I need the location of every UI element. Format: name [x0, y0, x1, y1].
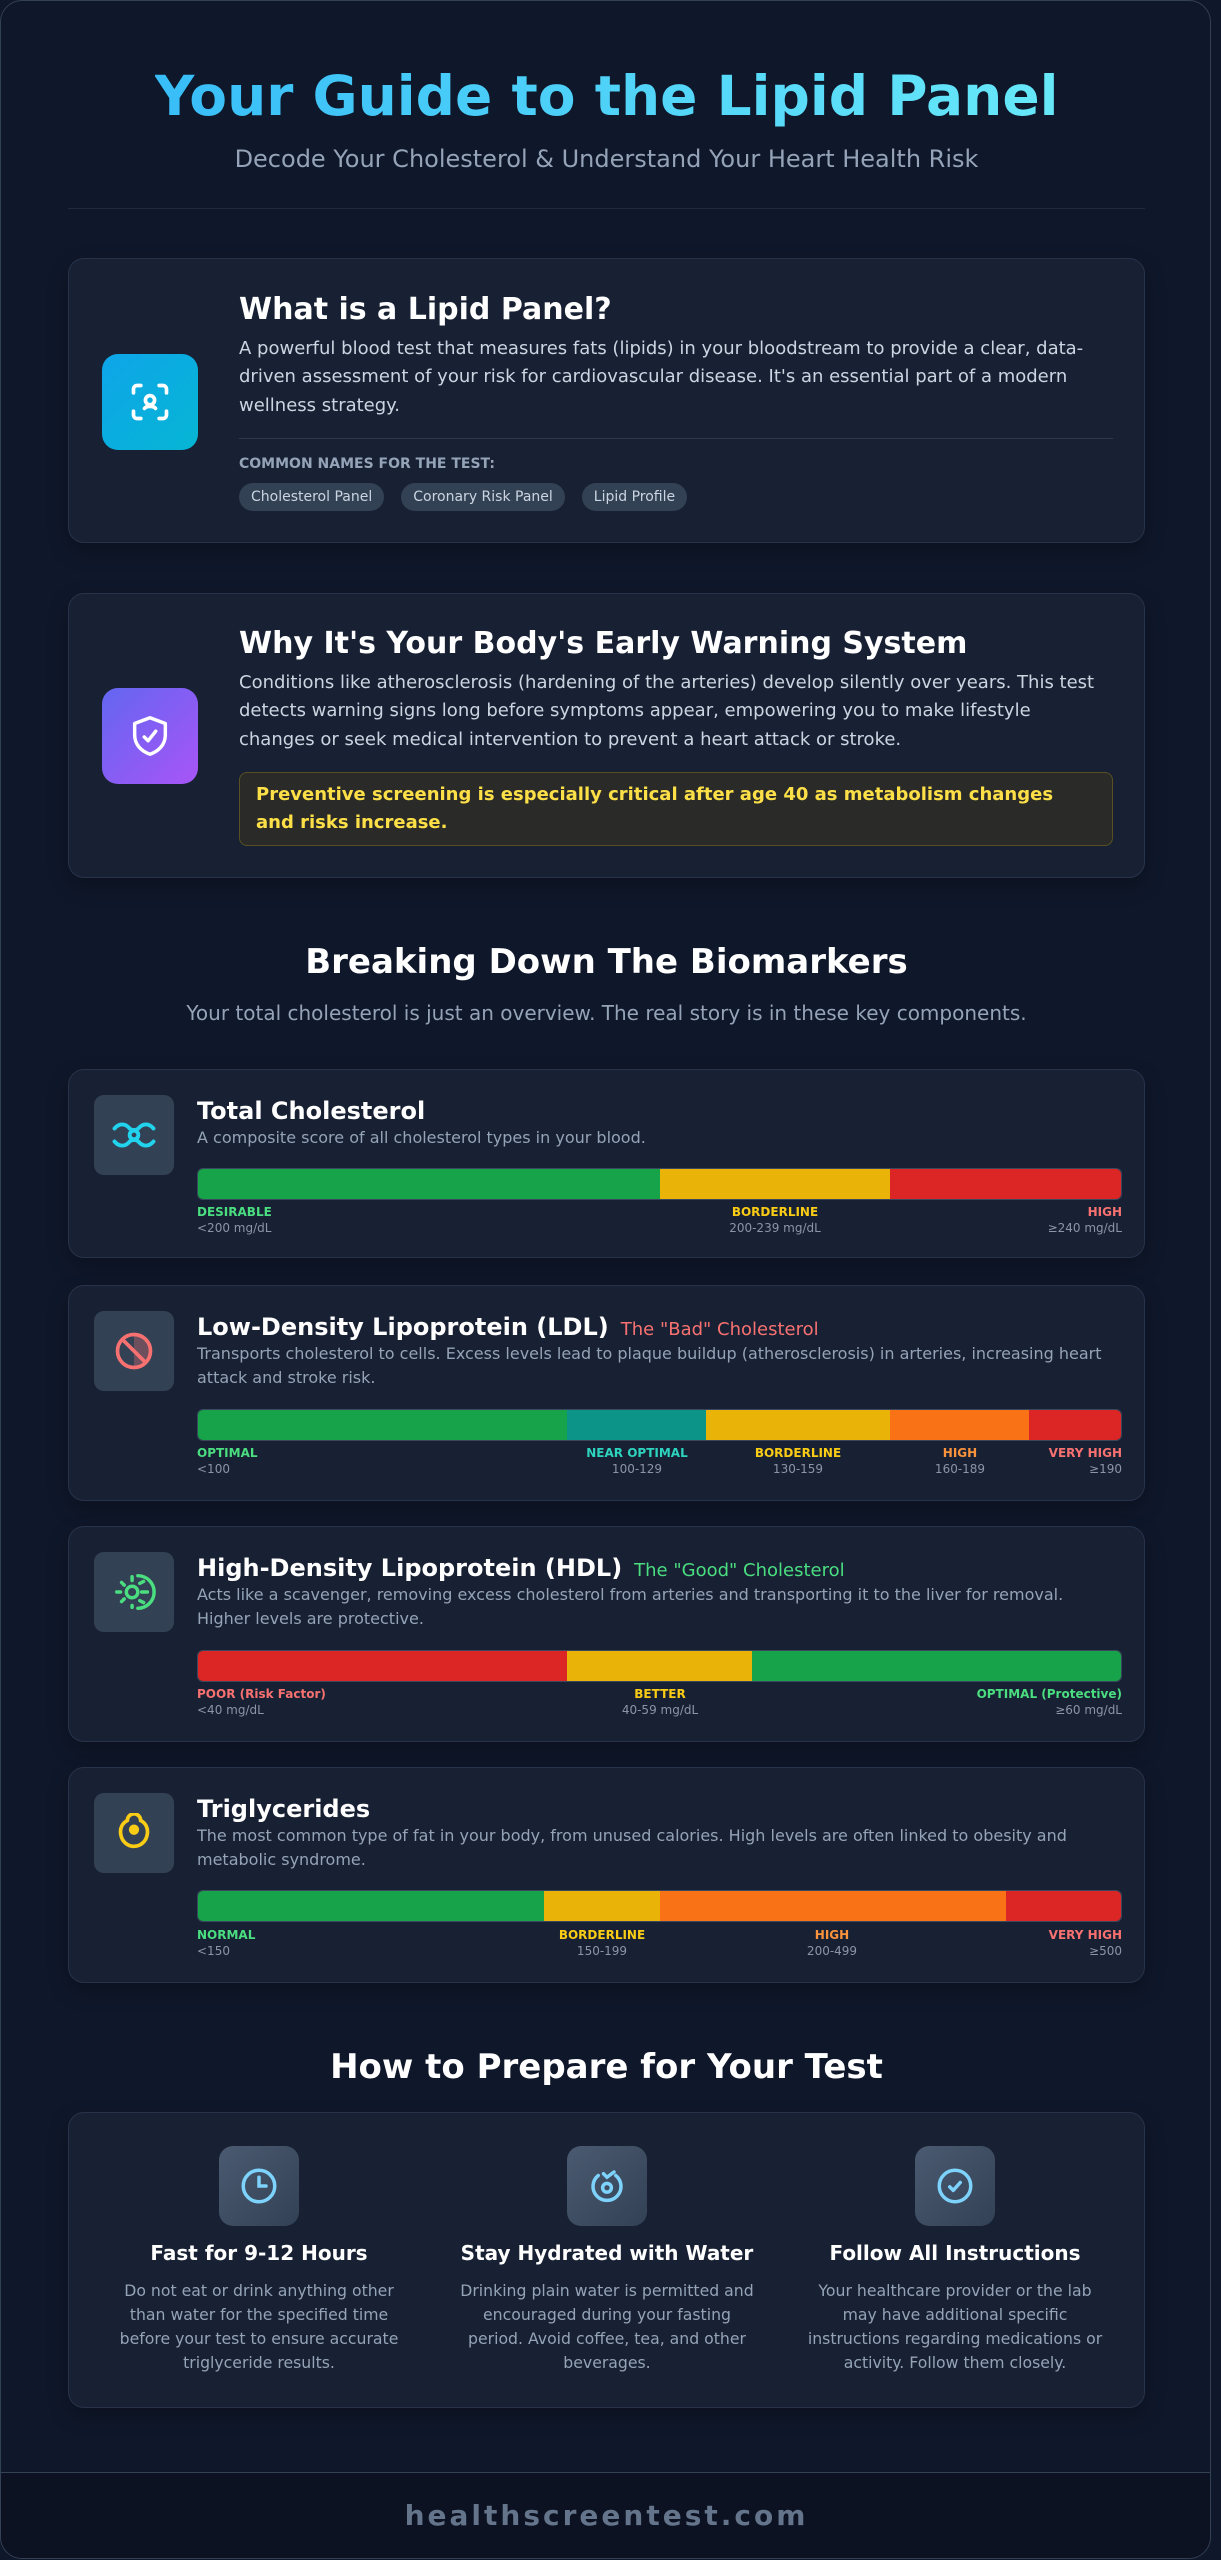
legend: NORMAL: [197, 1928, 255, 1942]
panel: preparation steps: [68, 2112, 1145, 2408]
panel: LDL: [68, 1285, 1145, 1501]
icon: ban: [94, 1311, 174, 1391]
step: instructions: Follow All Instructions: [829, 2241, 1081, 2265]
text block: A powerful blood test that measures fats (lipids) in your bloodstream to provide a clear, data-driven assessment of your risk for cardiovascular disease. It's an essential part of a modern wellness strategy.: [239, 338, 1083, 416]
legend: OPTIMAL: [197, 1446, 258, 1460]
icon: total cholesterol: [94, 1095, 174, 1175]
title: Your Guide to the Lipid Panel: [154, 64, 1058, 128]
legend: ≥500: [1089, 1944, 1122, 1958]
icon: scan: [102, 354, 198, 450]
legend: 200-239 mg/dL: [729, 1221, 821, 1235]
legend: 200-499: [807, 1944, 857, 1958]
legend: BETTER: [634, 1687, 686, 1701]
legend: ≥190: [1089, 1462, 1122, 1476]
legend: ≥240 mg/dL: [1048, 1221, 1122, 1235]
subtitle: Decode Your Cholesterol & Understand Your Heart Health Risk: [235, 145, 978, 173]
legend: POOR (Risk Factor): [197, 1687, 326, 1701]
step: hydrate: Stay Hydrated with Water: [461, 2241, 753, 2265]
text block: Conditions like atherosclerosis (hardening of the arteries) develop silently over years. This test detects warning signs long before symptoms appear, empowering you to make lifestyle changes or seek medical intervention to prevent a heart attack or stroke.: [239, 672, 1094, 750]
callout: [239, 772, 1113, 846]
legend: 150-199: [577, 1944, 627, 1958]
icon: sun: [94, 1552, 174, 1632]
text: The most common type of fat in your body, from unused calories. High levels are often linked to obesity and metabolic syndrome.: [197, 1826, 1067, 1869]
step: instructions: Your healthcare provider or the lab may have additional specific instructions regarding medications or activity. Follow them closely.: [808, 2281, 1102, 2372]
panel: HDL: [68, 1526, 1145, 1742]
legend: HIGH: [815, 1928, 849, 1942]
bar chart: [197, 1650, 1122, 1682]
legend: <40 mg/dL: [197, 1703, 264, 1717]
legend: 130-159: [773, 1462, 823, 1476]
panel: what is a lipid panel: [68, 258, 1145, 543]
icon: triglycerides: [94, 1793, 174, 1873]
callout: Preventive screening is especially critical after age 40 as metabolism changes and risks increase.: [256, 784, 1053, 833]
legend: 160-189: [935, 1462, 985, 1476]
legend: <200 mg/dL: [197, 1221, 271, 1235]
legend: [197, 1687, 1122, 1717]
step: instructions: [808, 2146, 1102, 2372]
legend: 100-129: [612, 1462, 662, 1476]
pills: Coronary Risk Panel: [413, 489, 553, 505]
pills: Lipid Profile: [594, 489, 675, 505]
legend: HIGH: [1088, 1205, 1122, 1219]
icon: shield: [102, 688, 198, 784]
icon: water: [567, 2146, 647, 2226]
legend: 40-59 mg/dL: [622, 1703, 698, 1717]
label: common names: COMMON NAMES FOR THE TEST:: [239, 456, 495, 472]
subheading: Your total cholesterol is just an overview. The real story is in these key components.: [186, 1001, 1027, 1025]
legend: NEAR OPTIMAL: [586, 1446, 688, 1460]
legend: OPTIMAL (Protective): [977, 1687, 1122, 1701]
legend: <150: [197, 1944, 230, 1958]
legend: HIGH: [943, 1446, 977, 1460]
heading: Total Cholesterol: [197, 1097, 425, 1125]
bar chart: [197, 1890, 1122, 1922]
pills: Cholesterol Panel: [251, 489, 372, 505]
legend: [197, 1446, 1122, 1476]
footer: [1, 2472, 1212, 2560]
footer: healthscreentest.com: [405, 2499, 808, 2532]
legend: DESIRABLE: [197, 1205, 272, 1219]
legend: ≥60 mg/dL: [1055, 1703, 1122, 1717]
heading: High-Density Lipoprotein (HDL) The "Good" Cholesterol: [197, 1554, 845, 1582]
step: fast: Do not eat or drink anything other than water for the specified time before your test to ensure accurate triglyceride results.: [120, 2281, 398, 2372]
step: hydrate: Drinking plain water is permitted and encouraged during your fasting period. Avoid coffee, tea, and other beverages.: [460, 2281, 754, 2372]
legend: VERY HIGH: [1049, 1928, 1122, 1942]
icon: check: [915, 2146, 995, 2226]
panel: total cholesterol: [68, 1069, 1145, 1258]
step: fast: [120, 2146, 398, 2372]
icon: clock: [219, 2146, 299, 2226]
panel: early warning: [68, 593, 1145, 878]
heading: Why It's Your Body's Early Warning System: [239, 626, 967, 661]
text: A composite score of all cholesterol types in your blood.: [197, 1128, 646, 1147]
legend: <100: [197, 1462, 230, 1476]
bar chart: [197, 1168, 1122, 1200]
heading: What is a Lipid Panel?: [239, 292, 612, 327]
panel: triglycerides: [68, 1767, 1145, 1983]
text: Acts like a scavenger, removing excess cholesterol from arteries and transporting it to the liver for removal. Higher levels are protective.: [197, 1585, 1063, 1628]
heading: prepare: How to Prepare for Your Test: [330, 2047, 883, 2087]
step: fast: Fast for 9-12 Hours: [150, 2241, 368, 2265]
step: hydrate: [460, 2146, 754, 2372]
bar chart: [197, 1409, 1122, 1441]
heading: Triglycerides: [197, 1795, 370, 1823]
text: Transports cholesterol to cells. Excess levels lead to plaque buildup (atherosclerosis) in arteries, increasing heart attack and stroke risk.: [197, 1344, 1102, 1387]
legend: VERY HIGH: [1049, 1446, 1122, 1460]
legend: BORDERLINE: [732, 1205, 818, 1219]
legend: BORDERLINE: [559, 1928, 645, 1942]
legend: BORDERLINE: [755, 1446, 841, 1460]
pills: [239, 483, 687, 511]
heading: Low-Density Lipoprotein (LDL) The "Bad" Cholesterol: [197, 1313, 819, 1341]
legend: [197, 1205, 1122, 1235]
heading: biomarkers: Breaking Down The Biomarkers: [305, 942, 908, 982]
legend: [197, 1928, 1122, 1958]
